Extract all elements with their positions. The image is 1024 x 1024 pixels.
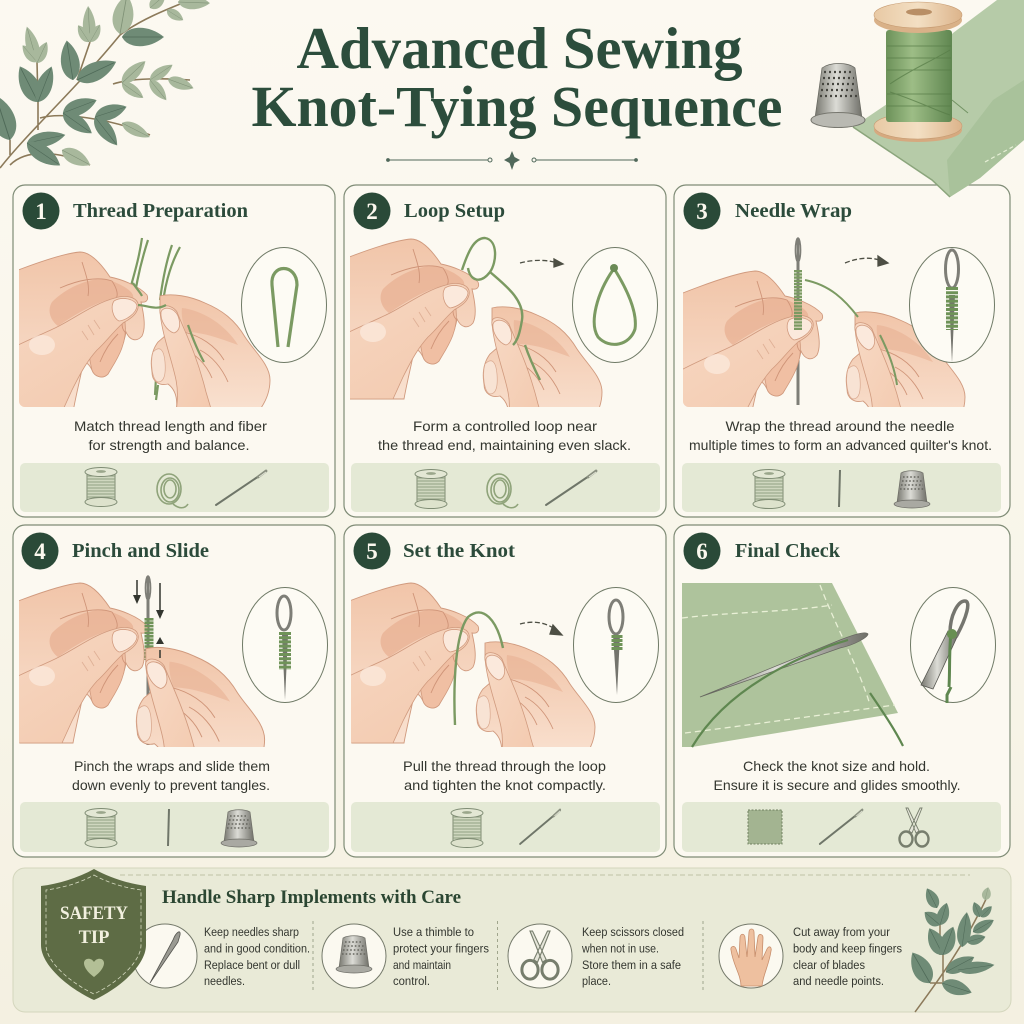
safety text: needles	[204, 925, 310, 988]
step 4 illustration: pinching the wraps	[19, 575, 266, 747]
step 6 description: Check the knot size and hold.	[743, 758, 930, 774]
step 5 description: and tighten the knot compactly.	[404, 777, 606, 793]
step 5 tools strip	[351, 802, 660, 852]
step 3 description	[689, 418, 992, 453]
safety text: thimble: protect your fingers	[393, 942, 489, 956]
step 2 illustration: forming a loop	[350, 236, 602, 407]
step 5 illustration: tightening the knot	[351, 582, 596, 747]
step 3 number badge: 3	[696, 199, 708, 224]
safety text: scissors: when not in use.	[581, 942, 659, 956]
safety tip shield badge	[41, 869, 146, 1000]
step 5 description: Pull the thread through the loop	[403, 758, 606, 774]
safety text: hand: Cut away from your	[793, 925, 890, 939]
step 1 description: Match thread length and fiber	[74, 418, 267, 434]
panel: step 5 set the knot	[343, 524, 667, 858]
step 5 number badge	[354, 532, 390, 570]
safety text: hand	[793, 925, 902, 988]
step 2 number badge	[354, 192, 390, 230]
step 5 arrow	[520, 622, 562, 635]
step 6 tools strip	[682, 802, 1001, 852]
safety text: scissors: Store them in a safe	[582, 958, 681, 972]
safety text: thimble: control.	[393, 974, 430, 988]
step 6 description	[714, 758, 960, 793]
step 6 heading: Final Check	[735, 540, 841, 562]
step 3 description: multiple times to form an advanced quilter's knot.	[689, 437, 992, 453]
heart icon	[84, 959, 104, 977]
step 1 description	[74, 418, 267, 453]
step 1 tools strip	[20, 463, 329, 512]
step 4 tools strip	[20, 802, 329, 852]
safety tip label: TIP	[79, 928, 109, 948]
safety tip label	[60, 904, 129, 948]
step 4 number badge	[22, 532, 58, 570]
step 5 inset: needle with knot	[574, 588, 658, 702]
step 1 illustration: hands holding thread	[0, 238, 270, 412]
step 3 description: Wrap the thread around the needle	[726, 418, 955, 434]
panel: step 6 final check	[674, 525, 1010, 857]
safety item: thimble	[322, 924, 386, 988]
step 4 number badge: 4	[34, 539, 46, 564]
step 1 number badge: 1	[35, 199, 47, 224]
step 4 arrows	[133, 580, 164, 658]
panel: step 3 needle wrap	[635, 185, 1010, 517]
step 6 number badge: 6	[696, 539, 708, 564]
step 3 inset: wrapped needle	[910, 248, 994, 363]
green fabric	[853, 0, 1024, 197]
step 3 number badge	[684, 192, 720, 230]
step 1 number badge	[22, 192, 60, 230]
step 2 description: the thread end, maintaining even slack.	[378, 437, 631, 453]
step 4 description: down evenly to prevent tangles.	[72, 777, 270, 793]
step 3 arrow	[845, 256, 888, 266]
title: Knot-Tying Sequence	[252, 74, 782, 139]
step 2 number badge: 2	[366, 199, 378, 224]
step 6 illustration: fabric with needle	[682, 583, 903, 747]
step 2 inset: teardrop loop	[572, 248, 658, 362]
step 4 description: Pinch the wraps and slide them	[74, 758, 270, 774]
step 4 heading: Pinch and Slide	[72, 540, 209, 562]
step 1 inset: thread loop	[242, 248, 326, 362]
panel: step 2 loop setup	[343, 184, 667, 518]
safety text: thimble: Use a thimble to	[393, 925, 474, 939]
safety text: scissors: place.	[582, 974, 611, 988]
safety text: scissors: Keep scissors closed	[582, 925, 684, 939]
step 2 heading: Loop Setup	[404, 200, 505, 222]
step 1 description: for strength and balance.	[88, 437, 250, 453]
step 2 description: Form a controlled loop near	[413, 418, 597, 434]
step 2 arrow	[520, 259, 563, 267]
step 6 number badge	[684, 532, 720, 570]
panel: step 4 pinch and slide	[0, 525, 335, 857]
safety text: hand: clear of blades	[793, 958, 865, 972]
title	[252, 15, 782, 139]
title: Advanced Sewing	[296, 15, 742, 81]
safety text: needles: Keep needles sharp	[204, 925, 299, 939]
safety item: hand	[719, 924, 783, 988]
decorative leaf branch top left	[0, 0, 210, 172]
step 2 tools strip	[351, 463, 660, 512]
safety text: needles: needles.	[204, 974, 245, 988]
safety text: hand: body and keep fingers	[793, 942, 902, 956]
step 6 description: Ensure it is secure and glides smoothly.	[714, 777, 960, 793]
step 5 heading: Set the Knot	[403, 540, 515, 562]
step 4 description	[72, 758, 270, 793]
safety tip label: SAFETY	[60, 904, 129, 924]
safety text: needles: Replace bent or dull	[204, 958, 300, 972]
step 4 inset: wrapped needle	[242, 588, 328, 702]
safety text: scissors	[581, 925, 684, 988]
safety text: thimble: and maintain	[393, 958, 451, 972]
step 5 description	[403, 758, 606, 793]
safety text: hand: and needle points.	[793, 974, 884, 988]
step 5 number badge: 5	[366, 539, 378, 564]
step 1 heading: Thread Preparation	[73, 200, 248, 222]
safety item: needle	[133, 924, 197, 988]
step 2 description	[378, 418, 631, 453]
decoration: fabric, spool and thimble	[811, 0, 1024, 197]
panel: safety tips	[13, 868, 1011, 1012]
leaf sprig, bottom right	[904, 886, 996, 1012]
title flourish	[387, 151, 637, 170]
safety item: scissors	[508, 924, 572, 988]
safety text: needles: and in good condition.	[204, 942, 310, 956]
step 3 tools strip	[682, 463, 1001, 512]
panel: step 1 thread preparation	[0, 185, 335, 517]
step 6 inset: needle and knot	[910, 588, 996, 703]
safety text: thimble	[393, 925, 489, 988]
safety heading: Handle Sharp Implements with Care	[162, 887, 461, 908]
silver thimble	[811, 64, 865, 128]
step 3 heading: Needle Wrap	[735, 200, 852, 222]
step 3 illustration: wrapping the needle	[683, 237, 966, 407]
wooden spool	[874, 2, 968, 142]
